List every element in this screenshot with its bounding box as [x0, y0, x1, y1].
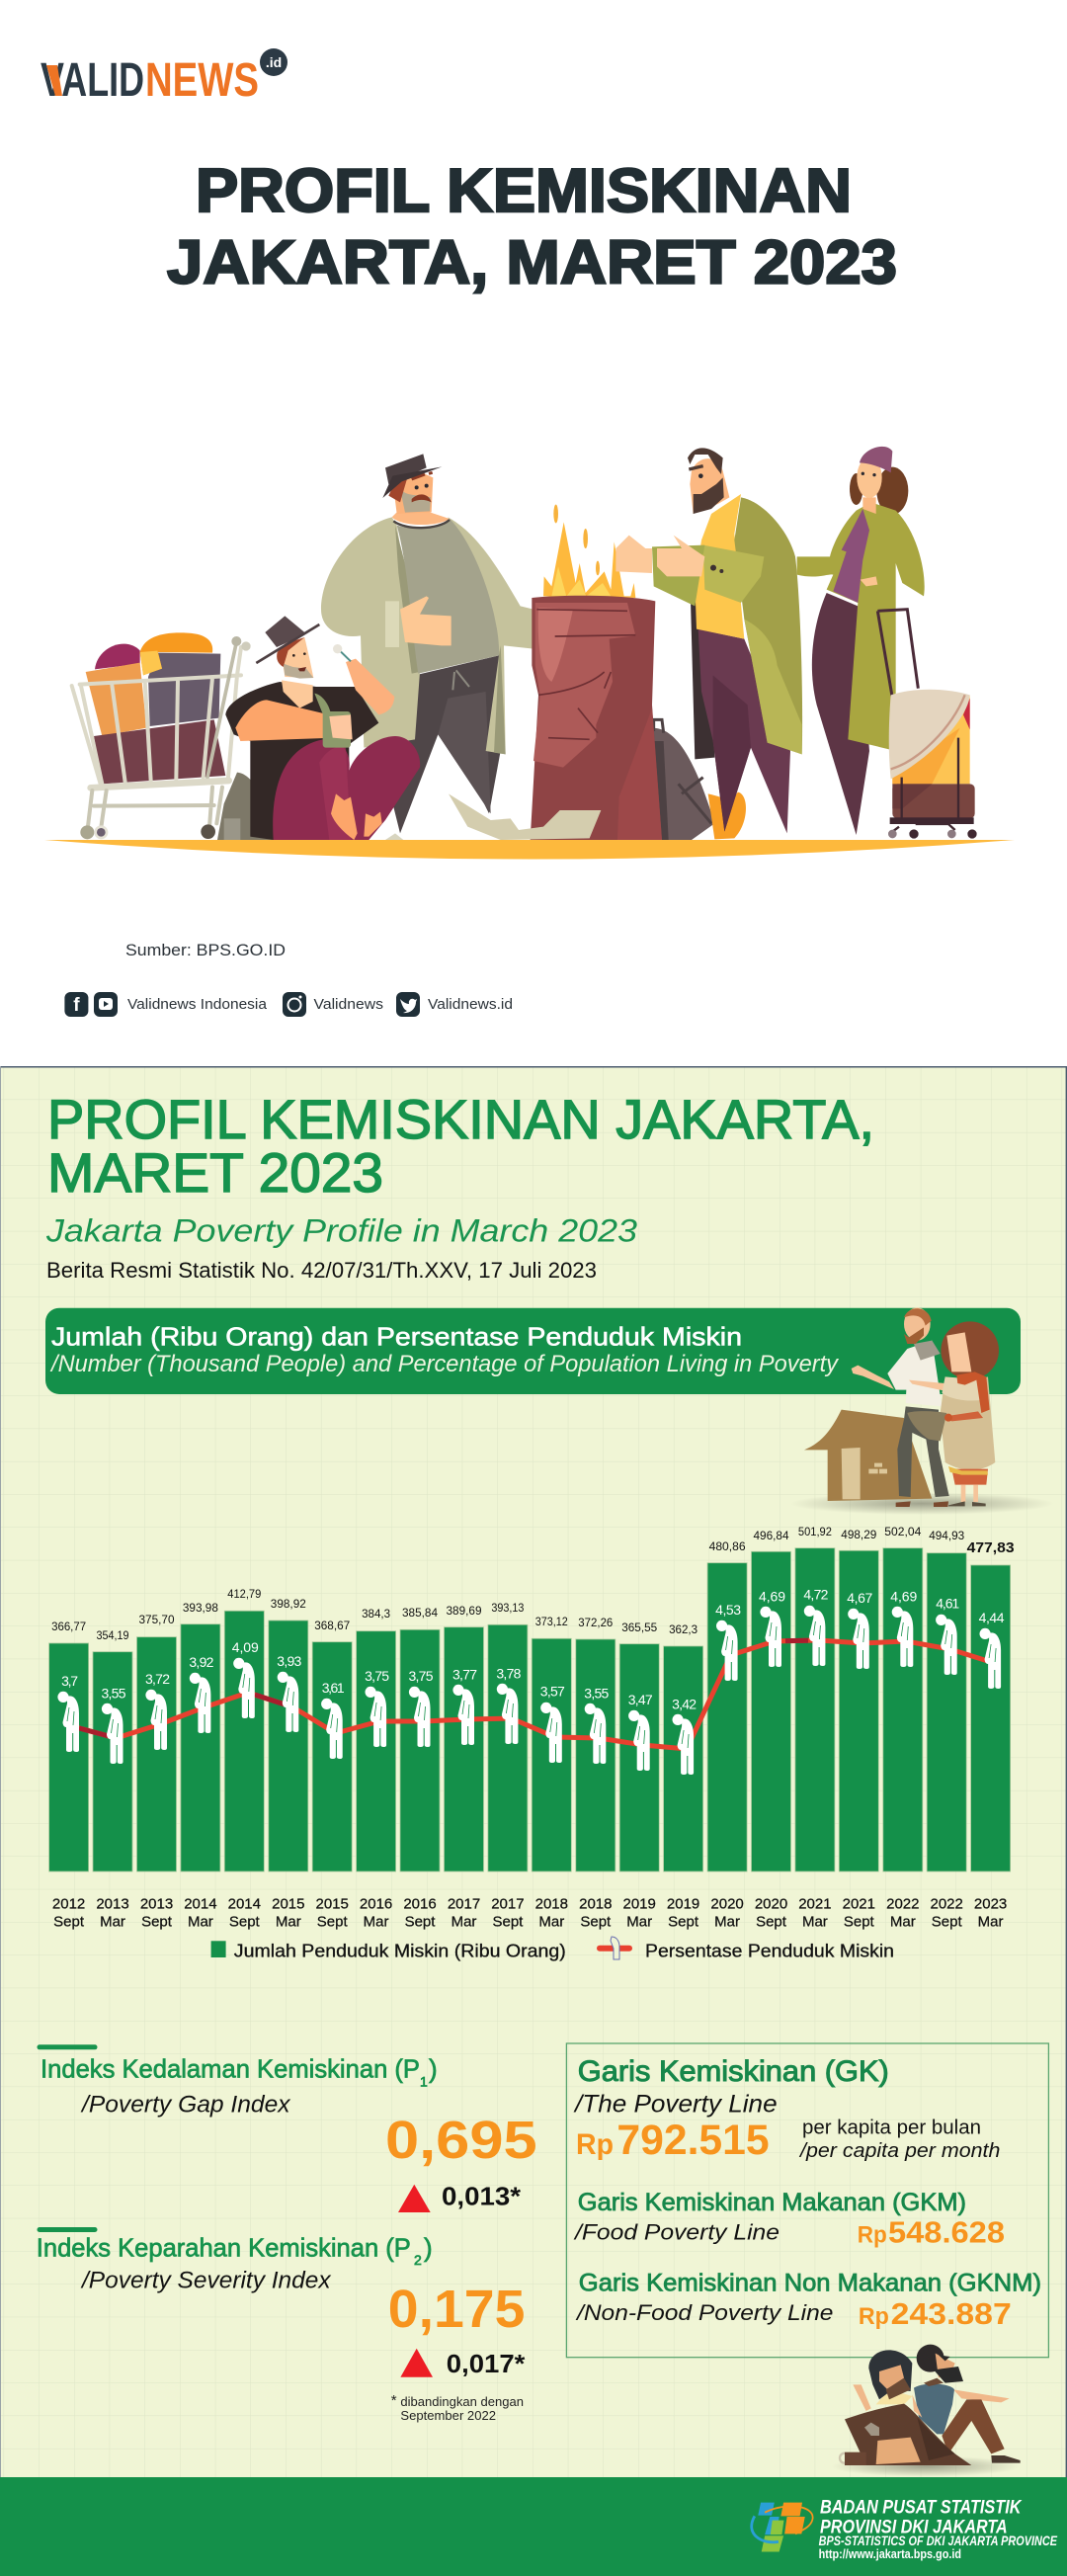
x axis labels: 2022	[886, 1895, 919, 1913]
logo: Validnews: NEWS	[145, 54, 259, 107]
x axis labels: Mar	[802, 1913, 828, 1931]
percentage labels: 3,55	[584, 1685, 610, 1701]
x axis labels: 2018	[535, 1895, 568, 1913]
woman	[907, 1321, 999, 1506]
woman	[853, 2350, 922, 2418]
percentage labels	[61, 1587, 1005, 1711]
percentage labels: 4,53	[715, 1602, 741, 1618]
change: 0,013*	[442, 2182, 522, 2211]
percentage labels: 3,75	[365, 1668, 389, 1684]
value: GKM: Rp	[858, 2222, 887, 2249]
x axis labels: Sept	[53, 1913, 85, 1931]
x axis labels: Mar	[276, 1913, 301, 1931]
logo: Validnews: .id	[266, 54, 282, 70]
panel title: PROFIL KEMISKINAN JAKARTA,	[47, 1088, 874, 1150]
value labels: number of poor people: 385,84	[402, 1606, 438, 1620]
title: JAKARTA, MARET 2023	[167, 229, 897, 296]
man	[914, 2345, 1021, 2463]
logo: Validnews	[41, 48, 287, 107]
legend swatch: bars	[211, 1941, 226, 1957]
illustration: couple and house	[790, 1307, 1054, 1515]
organisation name: BADAN PUSAT STATISTIK	[820, 2497, 1023, 2518]
heading: GKNM: Garis Kemiskinan Non Makanan (GKNM)	[579, 2269, 1041, 2296]
english subtitle: /Poverty Gap Index	[80, 2092, 291, 2119]
x axis labels: 2016	[403, 1895, 437, 1913]
panel title: MARET 2023	[47, 1141, 383, 1204]
percentage labels: 4,67	[847, 1590, 873, 1606]
x axis labels: Sept	[229, 1913, 261, 1931]
value: GKM: 548.628	[888, 2215, 1005, 2250]
x axis labels: Mar	[188, 1913, 213, 1931]
panel subtitle: Jakarta Poverty Profile in March 2023	[45, 1213, 637, 1249]
panel: poverty severity index	[37, 2227, 526, 2423]
subtitle: GKNM: /Non-Food Poverty Line	[575, 2300, 833, 2325]
unit note	[798, 2117, 1000, 2162]
percentage labels: 3,75	[409, 1668, 434, 1684]
x axis labels: Mar	[890, 1913, 916, 1931]
chart heading banner: Jumlah (Ribu Orang) dan Persentase Penduduk Miskin	[51, 1322, 742, 1352]
unit note: /per capita per month	[798, 2140, 1000, 2162]
percentage labels: 3,78	[496, 1665, 522, 1681]
x axis labels: Mar	[626, 1913, 652, 1931]
heading: )	[424, 2232, 433, 2262]
percentage labels: 3,42	[672, 1696, 697, 1711]
x axis labels: 2013	[140, 1895, 173, 1913]
value labels: number of poor people: 393,13	[491, 1601, 525, 1615]
panel: poverty line	[566, 2043, 1048, 2358]
x axis labels: 2022	[931, 1895, 963, 1913]
roll	[708, 792, 746, 839]
woman	[797, 447, 925, 835]
trend line: percentage of poor population	[72, 1640, 994, 1749]
heading: 1	[420, 2073, 428, 2089]
heading: GKM: Garis Kemiskinan Makanan (GKM)	[578, 2189, 966, 2216]
value labels: number of poor people: 477,83	[967, 1540, 1015, 1556]
heading: GK: Garis Kemiskinan (GK)	[578, 2055, 889, 2088]
footnote: September 2022	[400, 2408, 496, 2423]
percentage labels: 3,77	[452, 1666, 477, 1682]
ground	[44, 840, 1015, 860]
percentage labels: 4,61	[936, 1596, 959, 1612]
panel title	[47, 1088, 874, 1204]
x axis labels: Mar	[451, 1913, 476, 1931]
value labels: number of poor people: 354,19	[97, 1628, 129, 1642]
value: GK: 792.515	[616, 2117, 770, 2164]
x axis labels: 2015	[316, 1895, 349, 1913]
value labels: number of poor people: 412,79	[227, 1587, 262, 1601]
x axis labels: 2014	[228, 1895, 261, 1913]
value: GKNM: 243.887	[891, 2296, 1012, 2331]
footnote: dibandingkan dengan	[400, 2394, 524, 2409]
icon: twitter	[396, 992, 420, 1017]
subtitle: GK: /The Poverty Line	[573, 2091, 778, 2119]
house	[804, 1410, 932, 1501]
chart heading banner: /Number (Thousand People) and Percentage of Population Living in Poverty	[49, 1351, 840, 1377]
x axis labels: Sept	[844, 1913, 875, 1931]
illustration: homeless people around a fire	[44, 447, 1015, 860]
person figures	[57, 1606, 1001, 1775]
value labels: number of poor people: 393,98	[183, 1601, 218, 1615]
sitting man with can	[217, 616, 420, 840]
x axis labels: Sept	[932, 1913, 962, 1931]
release reference: Berita Resmi Statistik No. 42/07/31/Th.XXV, 17 Juli 2023	[46, 1258, 597, 1283]
bar chart	[49, 1525, 1015, 1931]
icon: BPS logo	[752, 2503, 813, 2551]
value labels: number of poor people: 362,3	[669, 1622, 698, 1636]
x axis labels: 2015	[272, 1895, 304, 1913]
value: 0,695	[385, 2111, 537, 2170]
value labels: number of poor people: 372,26	[578, 1616, 614, 1629]
percentage labels: 4,69	[759, 1588, 785, 1604]
icon: facebook: f	[73, 995, 80, 1016]
value labels: number of poor people: 480,86	[709, 1539, 746, 1553]
icon: shopping cart with bags	[72, 632, 251, 839]
x axis labels: Sept	[668, 1913, 699, 1931]
panel: poverty gap index	[38, 2044, 537, 2212]
x axis labels: Sept	[580, 1913, 612, 1931]
x axis labels: Mar	[978, 1913, 1004, 1931]
x axis labels: 2012	[52, 1895, 85, 1913]
value labels: number of poor people: 366,77	[51, 1620, 86, 1633]
illustration: couple sitting back to back	[832, 2345, 1021, 2477]
organisation name	[819, 2497, 1058, 2548]
x axis labels: Mar	[538, 1913, 564, 1931]
standing man with beard and woman with suitcase	[616, 447, 977, 839]
heading: Indeks Kedalaman Kemiskinan (P	[41, 2053, 420, 2083]
x axis labels: 2021	[843, 1895, 875, 1913]
suitcase	[877, 610, 977, 839]
x axis labels: 2020	[710, 1895, 744, 1913]
value labels: number of poor people: 384,3	[362, 1607, 390, 1620]
percentage labels: 4,69	[890, 1588, 918, 1604]
icon: instagram	[283, 992, 306, 1017]
heading: Indeks Keparahan Kemiskinan (P	[37, 2232, 411, 2262]
legend label: bars: Jumlah Penduduk Miskin (Ribu Orang)	[234, 1942, 566, 1961]
chart heading banner	[45, 1308, 1021, 1394]
percentage labels: 4,72	[803, 1587, 829, 1603]
x axis labels	[52, 1895, 1007, 1931]
legend	[211, 1937, 894, 1961]
text: twitter name: Validnews.id	[428, 996, 513, 1013]
standing man	[321, 454, 534, 840]
heading: )	[429, 2053, 438, 2083]
value labels: number of poor people: 502,04	[884, 1525, 922, 1538]
organisation name: PROVINSI DKI JAKARTA	[820, 2517, 1008, 2537]
source line: Sumber: BPS.GO.ID	[125, 942, 286, 959]
value labels: number of poor people	[51, 1525, 1015, 1642]
value: GKNM: Rp	[859, 2303, 889, 2330]
barrel	[531, 596, 662, 840]
man	[852, 1307, 949, 1507]
percentage labels: 3,61	[322, 1680, 345, 1696]
x axis labels: 2021	[798, 1895, 832, 1913]
value labels: number of poor people: 501,92	[798, 1525, 832, 1538]
value labels: number of poor people: 368,67	[314, 1619, 351, 1632]
panel: BPS infographic background	[0, 1066, 1067, 2576]
value labels: number of poor people: 494,93	[929, 1529, 965, 1542]
x axis labels: 2013	[96, 1895, 129, 1913]
x axis labels: 2019	[667, 1895, 699, 1913]
value labels: number of poor people: 398,92	[271, 1597, 306, 1611]
x axis labels: Sept	[405, 1913, 436, 1931]
paper	[449, 793, 601, 840]
value labels: number of poor people: 373,12	[535, 1615, 568, 1628]
percentage labels: 4,09	[232, 1639, 259, 1655]
logo: Validnews: VALID	[41, 54, 144, 107]
heading: 2	[414, 2252, 422, 2268]
text: instagram name: Validnews	[314, 996, 383, 1013]
percentage labels: 3,55	[101, 1685, 126, 1701]
accent bar	[38, 2044, 97, 2049]
x axis labels: 2017	[448, 1895, 480, 1913]
percentage labels: 3,57	[540, 1684, 565, 1700]
x axis labels: 2014	[184, 1895, 217, 1913]
percentage labels: 3,47	[628, 1692, 653, 1707]
value labels: number of poor people: 375,70	[138, 1613, 175, 1626]
icon: facebook	[64, 992, 88, 1017]
percentage labels: 4,44	[979, 1610, 1005, 1625]
x axis labels: 2023	[974, 1895, 1007, 1913]
x axis labels: Mar	[714, 1913, 740, 1931]
website: http://www.jakarta.bps.go.id	[819, 2546, 961, 2561]
value labels: number of poor people: 365,55	[621, 1620, 658, 1634]
percentage labels: 3,7	[61, 1673, 78, 1689]
title	[167, 157, 897, 296]
legend label: line: Persentase Penduduk Miskin	[645, 1942, 894, 1961]
x axis labels: 2020	[755, 1895, 787, 1913]
x axis labels: Sept	[141, 1913, 173, 1931]
social media row	[64, 992, 513, 1017]
text: facebook and youtube name: Validnews Indonesia	[127, 996, 268, 1013]
percentage labels: 3,92	[189, 1654, 214, 1670]
accent bar	[38, 2227, 97, 2232]
icon: up triangle	[398, 2185, 431, 2212]
value: 0,175	[388, 2280, 525, 2339]
percentage labels: 3,72	[145, 1671, 170, 1687]
x axis labels: Sept	[756, 1913, 787, 1931]
icon: youtube	[94, 992, 118, 1017]
panel: header	[41, 48, 897, 296]
bearded man	[616, 448, 802, 833]
english subtitle: /Poverty Severity Index	[80, 2268, 332, 2294]
bag	[840, 2404, 971, 2465]
percentage labels: 3,93	[277, 1653, 302, 1669]
x axis labels: 2016	[360, 1895, 392, 1913]
title: PROFIL KEMISKINAN	[196, 157, 852, 225]
footnote	[391, 2392, 524, 2423]
footer band	[0, 2477, 1067, 2576]
bars	[49, 1548, 1011, 1871]
footnote: *	[391, 2392, 397, 2409]
subtitle: GKM: /Food Poverty Line	[573, 2219, 780, 2244]
change: 0,017*	[447, 2349, 526, 2378]
unit note: per kapita per bulan	[802, 2117, 981, 2138]
x axis labels: 2018	[579, 1895, 612, 1913]
x axis labels: Sept	[317, 1913, 348, 1931]
value labels: number of poor people: 498,29	[841, 1528, 877, 1541]
x axis labels: 2019	[623, 1895, 656, 1913]
legend icon: line and person	[600, 1937, 629, 1959]
standing man, barrel with fire, backpack, paper	[321, 454, 714, 840]
fire	[543, 505, 635, 598]
x axis labels: Mar	[364, 1913, 389, 1931]
x axis labels: Mar	[100, 1913, 125, 1931]
value: GK: Rp	[576, 2128, 614, 2161]
value labels: number of poor people: 389,69	[447, 1604, 482, 1618]
value labels: number of poor people: 496,84	[753, 1529, 789, 1542]
x axis labels: 2017	[491, 1895, 525, 1913]
icon: up triangle	[400, 2349, 433, 2377]
x axis labels: Sept	[492, 1913, 524, 1931]
